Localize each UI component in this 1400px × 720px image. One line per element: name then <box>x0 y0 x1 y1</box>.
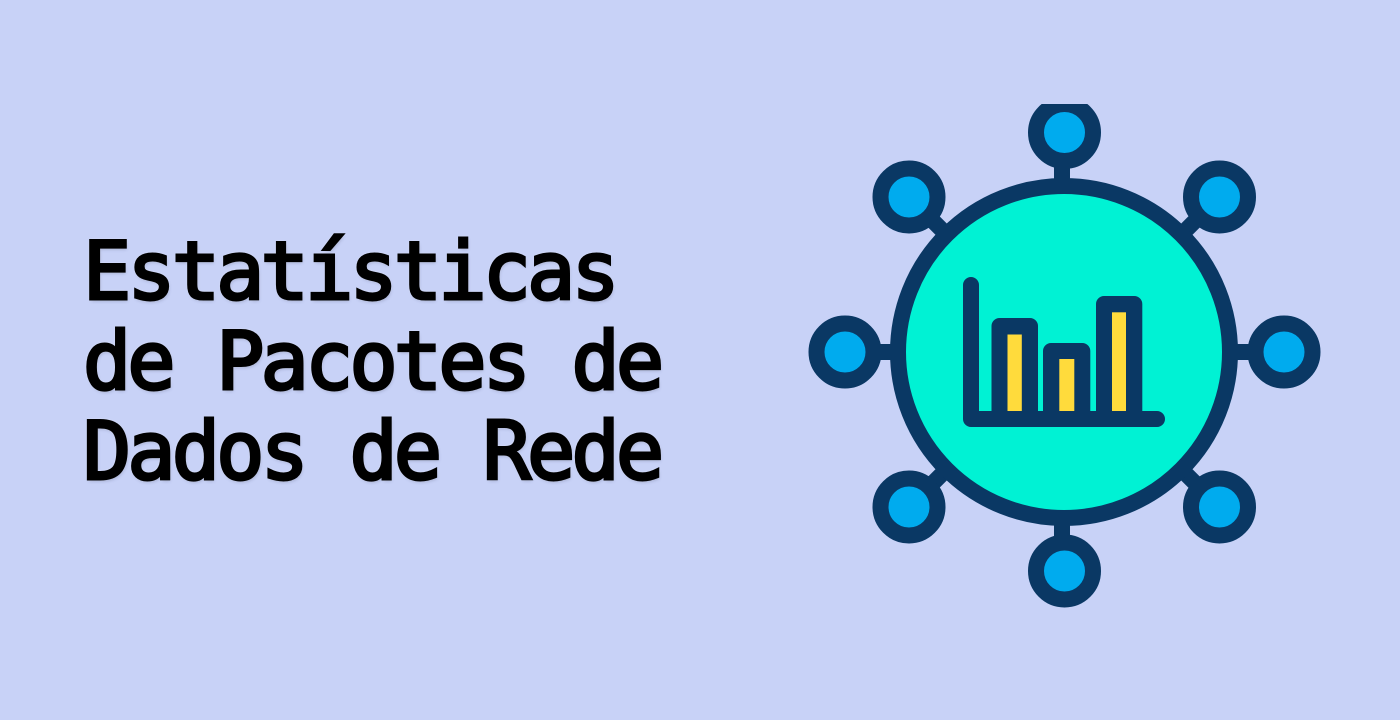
node: top left <box>880 168 938 226</box>
title: de Pacotes de <box>83 315 660 408</box>
title <box>83 225 662 498</box>
node: left <box>816 324 874 380</box>
chart axes <box>971 285 1157 419</box>
node: bottom right <box>1191 478 1248 536</box>
bar chart <box>971 285 1157 419</box>
bar 3 <box>1096 296 1142 412</box>
node: bottom <box>1036 542 1093 600</box>
title: Dados de Rede <box>83 405 660 498</box>
bar 1 <box>992 318 1038 412</box>
node: top right <box>1191 168 1248 226</box>
connectors between hub and nodes <box>875 160 1255 545</box>
node: right <box>1256 324 1312 380</box>
node: top <box>1036 104 1093 161</box>
bar 2 <box>1043 343 1090 412</box>
hub circle <box>898 186 1230 518</box>
title: Estatísticas <box>83 225 616 318</box>
node: bottom left <box>880 478 938 536</box>
icon: network hub with bar chart <box>808 104 1320 608</box>
